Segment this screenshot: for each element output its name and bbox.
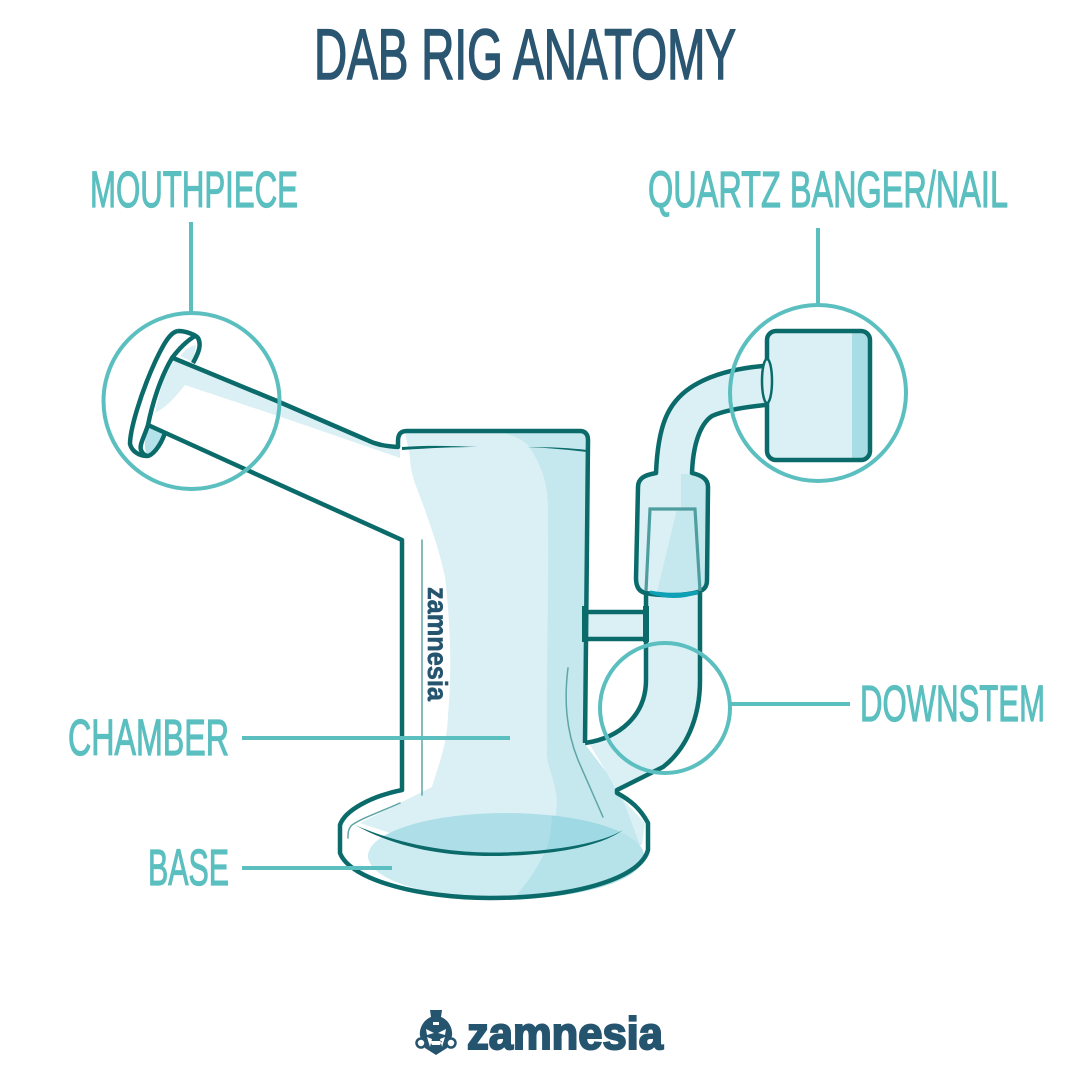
joint shading — [657, 474, 708, 592]
quartz bend outline — [636, 366, 765, 595]
rig outline — [148, 358, 700, 898]
icon: tribal mask — [416, 1010, 456, 1055]
quartz banger — [762, 331, 870, 460]
thin glass highlights — [348, 540, 603, 838]
chamber glass fill — [360, 430, 645, 875]
callout: chamber: CHAMBER — [68, 709, 229, 766]
mouthpiece flange — [130, 331, 200, 456]
callout: downstem — [600, 643, 1045, 773]
inner taper joint — [646, 509, 700, 591]
meniscus — [650, 592, 698, 596]
callout: mouthpiece — [90, 161, 298, 489]
wordmark: zamnesia — [467, 1008, 664, 1059]
connector joints — [585, 606, 646, 642]
callout: quartz banger/nail — [648, 161, 1008, 481]
dab rig illustration — [130, 331, 870, 900]
chamber rim lines — [402, 446, 587, 452]
base liquid — [368, 813, 644, 898]
base inner rim — [355, 825, 623, 856]
mouthpiece glass shading — [145, 345, 400, 458]
title: DAB RIG ANATOMY — [314, 16, 736, 95]
chamber logo: zamnesia — [422, 587, 453, 701]
connector fill — [587, 612, 646, 639]
callout: base: BASE — [148, 839, 229, 896]
footer logo — [416, 1008, 664, 1059]
callout: mouthpiece: MOUTHPIECE — [90, 161, 298, 218]
quartz stem and bend fill — [590, 366, 765, 790]
